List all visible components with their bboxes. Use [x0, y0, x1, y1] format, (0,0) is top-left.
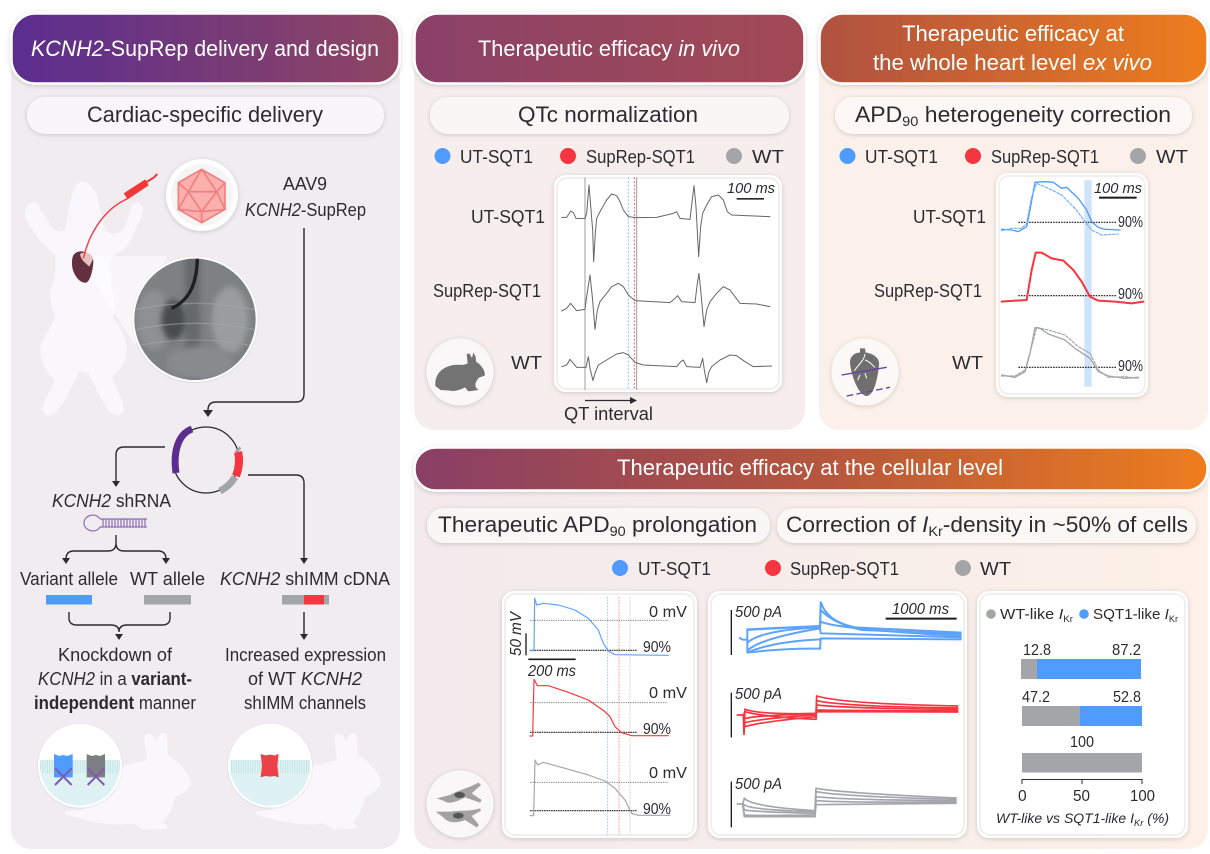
legend: groups: SupRep-SQT1: [586, 146, 695, 167]
icon: heart: [72, 251, 93, 283]
text: knockdown description: KCNH2 in a variant-: [38, 668, 192, 689]
bar: UT-SQT1: 12.8: [1023, 642, 1051, 659]
legend: groups: [612, 558, 1011, 579]
bar: WT: 100: [1070, 734, 1094, 751]
chart: patch clamp IKr currents: 500 pA: [735, 604, 782, 621]
heading: whole heart ex vivo: Therapeutic efficacy at: [902, 21, 1124, 46]
subheading: cardiac-specific delivery: [27, 97, 384, 134]
chart: patch clamp IKr currents: 1000 ms: [892, 601, 949, 618]
text: increased expression description: Increased expression: [225, 644, 386, 665]
label: AAV9 KCNH2-SupRep: AAV9: [283, 173, 327, 194]
heading: cellular level: [414, 448, 1208, 490]
chart: ECG traces: [554, 175, 782, 392]
icon: rabbit with knocked-down channels: [37, 724, 191, 829]
legend: groups: [434, 146, 784, 167]
legend: groups: SupRep-SQT1: [991, 146, 1099, 167]
axis: percentage: Kr: [1134, 818, 1144, 828]
axis: percentage: WT-like vs SQT1-like I: [996, 811, 1129, 826]
bar: SupRep-SQT1: 47.2: [1022, 689, 1050, 706]
bar: UT-SQT1: 87.2: [1112, 642, 1141, 659]
chart: cellular action potentials: 200 ms: [527, 663, 576, 680]
chart: cellular action potentials: 50 mV: [508, 610, 525, 656]
arrow: alleles to knockdown: [69, 612, 170, 640]
chart: cellular action potentials: 90%: [643, 801, 671, 818]
chart: cellular action potentials: 90%: [643, 639, 671, 656]
icon: mouse silhouette with heart and syringe: [25, 174, 167, 416]
subheading: IKr density correction: Kr: [928, 523, 943, 539]
subheading: IKr density correction: -density in ~50% of cells: [943, 512, 1188, 537]
heading: delivery and design: [12, 14, 400, 84]
chart: cellular action potentials: 0 mV: [649, 765, 687, 782]
bar: WT: [1022, 734, 1142, 772]
chart: cellular action potentials: [502, 591, 697, 838]
bar: SupRep-SQT1: 52.8: [1113, 689, 1141, 706]
chart: optical action potentials: [996, 173, 1148, 397]
axis: percentage: 100: [1130, 788, 1155, 805]
image: fluoroscopy circle: [130, 257, 260, 383]
axis: percentage: 0: [1018, 788, 1027, 805]
zoom wedge: [93, 256, 167, 345]
icon: rabbit: [426, 338, 494, 406]
arrow: QT interval: QT interval: [564, 403, 653, 424]
text: increased expression description: of WT KCNH2: [248, 668, 363, 689]
subheading: QTc normalization: [430, 97, 789, 134]
arrow: AAV9 to plasmid: [203, 228, 304, 417]
label: KCNH2 shIMM cDNA: KCNH2 shIMM cDNA: [220, 568, 391, 589]
legend: groups: [840, 146, 1188, 167]
icon: syringe: [83, 174, 157, 258]
text: increased expression description: [225, 644, 386, 713]
label: SupRep-SQT1: SupRep-SQT1: [874, 280, 982, 301]
legend: groups: SupRep-SQT1: [790, 558, 899, 579]
subheading: APD90 heterogeneity correction: APD: [855, 102, 900, 127]
label: WT: WT: [511, 352, 542, 373]
heading: cellular level: Therapeutic efficacy at the cellular level: [617, 455, 1003, 480]
panel: whole heart ex vivo: [819, 14, 1208, 430]
label: AAV9 KCNH2-SupRep: KCNH2-SupRep: [245, 199, 366, 220]
heading: in vivo: Therapeutic efficacy in vivo: [478, 36, 740, 61]
legend: IKr types: [986, 606, 1178, 624]
chart: optical action potentials: 90%: [1118, 358, 1143, 375]
subheading: QTc normalization: QTc normalization: [518, 102, 698, 127]
legend: groups: WT: [752, 146, 784, 167]
panel: therapeutic efficacy at the cellular level: [414, 448, 1208, 849]
icon: shRNA hairpin: [84, 515, 147, 531]
arrows: shRNA to alleles: [62, 535, 170, 564]
subheading: APD90 heterogeneity correction: heterogeneity correction: [918, 102, 1171, 127]
bar: UT-SQT1: [1021, 642, 1141, 679]
chart: patch clamp IKr currents: 500 pA: [735, 686, 782, 703]
label: WT: WT: [952, 352, 983, 373]
axis: percentage: 50: [1073, 788, 1090, 805]
legend: IKr types: Kr: [1063, 614, 1073, 624]
legend: groups: UT-SQT1: [865, 146, 938, 167]
legend: groups: UT-SQT1: [638, 558, 711, 579]
panel: KCNH2-SupRep delivery and design: [11, 14, 400, 849]
legend: groups: WT: [1156, 146, 1188, 167]
subheading: cardiac-specific delivery: Cardiac-specific delivery: [87, 102, 323, 127]
chart: WT-like vs SQT1-like stacked bars: [977, 591, 1188, 838]
subheading: APD90 prolongation: 90: [610, 523, 626, 539]
subheading: APD90 prolongation: Therapeutic APD: [438, 512, 604, 537]
panel: therapeutic efficacy in vivo: [414, 14, 805, 430]
axis: percentage: [996, 780, 1169, 828]
text: increased expression description: shIMM channels: [244, 692, 366, 713]
subheading: IKr density correction: [777, 508, 1196, 543]
subheading: APD90 heterogeneity correction: [835, 97, 1192, 134]
chart: optical action potentials: 90%: [1118, 214, 1143, 231]
legend: IKr types: Kr: [1169, 614, 1178, 624]
chart: optical action potentials: 100 ms: [1094, 180, 1142, 197]
legend: IKr types: WT-like I: [1000, 606, 1063, 623]
icon: rabbit with rescued channels: [227, 724, 381, 829]
icon: cardiomyocytes: [426, 770, 494, 838]
icon: AAV9 capsid: [166, 159, 238, 231]
bar: shIMM cDNA: [282, 595, 329, 604]
legend: groups: UT-SQT1: [460, 146, 533, 167]
chart: cellular action potentials: 0 mV: [649, 685, 687, 702]
chart: ECG traces: 100 ms: [727, 180, 775, 197]
chart: cellular action potentials: 90%: [643, 721, 671, 738]
label: SupRep-SQT1: SupRep-SQT1: [433, 280, 541, 301]
label: variant allele: Variant allele: [20, 568, 118, 589]
chart: optical action potentials: 90%: [1118, 286, 1143, 303]
chart: patch clamp IKr currents: [708, 591, 967, 838]
diagram: plasmid: [173, 427, 239, 493]
arrow: plasmid to shRNA: [112, 447, 165, 487]
bar: WT allele: [144, 595, 191, 604]
label: WT allele: WT allele: [130, 568, 205, 589]
heading: delivery and design: KCNH2-SupRep delivery and design: [31, 36, 379, 61]
subheading: APD90 heterogeneity correction: 90: [902, 113, 919, 129]
legend: IKr types: SQT1-like I: [1093, 606, 1169, 623]
label: UT-SQT1: UT-SQT1: [471, 206, 545, 227]
heading: whole heart ex vivo: the whole heart level ex vivo: [873, 50, 1152, 75]
chart: patch clamp IKr currents: 500 pA: [735, 776, 782, 793]
axis: percentage: (%): [1143, 811, 1169, 826]
label: KCNH2 shRNA: KCNH2 shRNA: [52, 490, 172, 511]
heading: in vivo: [414, 14, 804, 84]
chart: cellular action potentials: 0 mV: [649, 604, 687, 621]
arrow: plasmid to shIMM cDNA: [248, 475, 308, 564]
heading: whole heart ex vivo: [820, 14, 1208, 84]
icon: sectioned heart: [832, 338, 898, 406]
subheading: IKr density correction: Correction of I: [786, 512, 928, 537]
text: knockdown description: [34, 644, 196, 713]
label: AAV9 KCNH2-SupRep: [245, 173, 366, 220]
legend: groups: WT: [980, 558, 1011, 579]
text: knockdown description: Knockdown of: [58, 644, 173, 665]
bar: variant allele: [46, 595, 92, 604]
subheading: APD90 prolongation: [427, 508, 770, 543]
bar: SupRep-SQT1: [1022, 689, 1142, 726]
subheading: APD90 prolongation: prolongation: [626, 512, 757, 537]
arrow: cDNA to expression: [300, 612, 308, 640]
label: UT-SQT1: UT-SQT1: [913, 206, 986, 227]
text: knockdown description: independent manner: [34, 692, 196, 713]
